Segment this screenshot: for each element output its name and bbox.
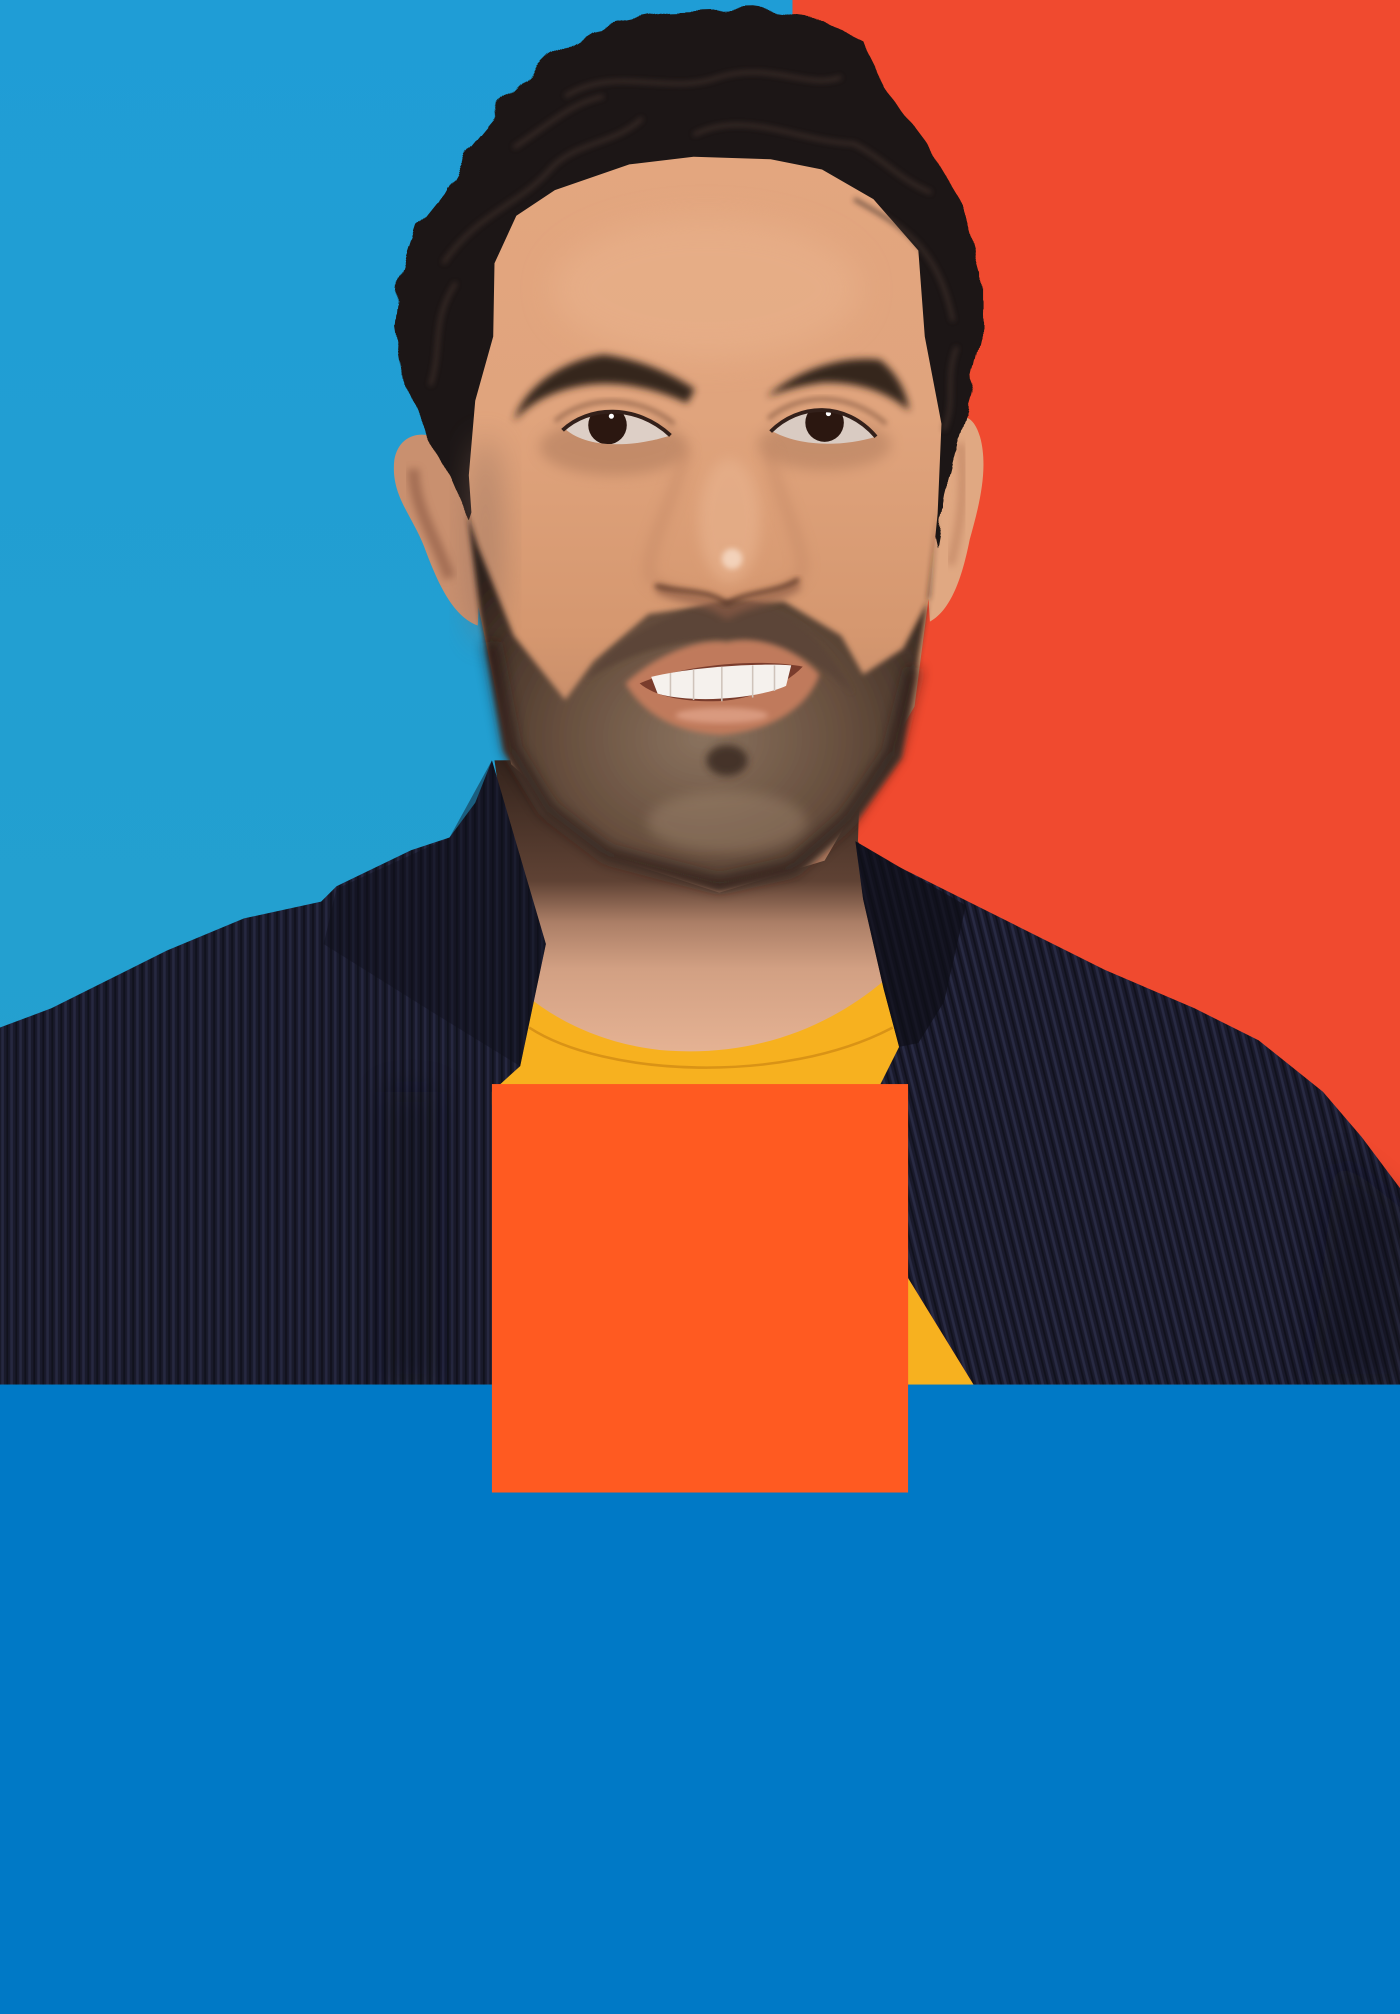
glint — [826, 411, 831, 416]
eyeball — [566, 414, 668, 444]
ear right — [925, 417, 983, 622]
lips — [626, 640, 819, 735]
mouth interior — [640, 663, 803, 701]
eye socket shadow — [539, 419, 688, 475]
eye left — [539, 398, 688, 475]
jaw dark edge — [491, 642, 914, 884]
t-shirt — [486, 976, 974, 1385]
upper lid — [563, 412, 670, 435]
ear right shape — [925, 417, 983, 622]
ear right inner — [950, 443, 963, 565]
jacket — [0, 760, 1400, 1385]
background: red right half — [792, 0, 1400, 1385]
lower lip highlight — [676, 708, 768, 723]
eye socket shadow — [758, 419, 891, 470]
soul patch — [706, 745, 748, 776]
shirt hem below square — [908, 1278, 974, 1385]
blue lower panel — [0, 1385, 1400, 2014]
tooth gaps — [670, 665, 774, 701]
eyelid fold — [555, 401, 674, 424]
ear left shape — [394, 435, 482, 626]
moustache — [586, 601, 853, 694]
left collar shadow — [324, 760, 546, 1066]
beard — [468, 507, 938, 891]
cheek left shading — [468, 437, 503, 642]
eyeball — [773, 412, 874, 444]
sclera — [566, 414, 668, 444]
ear left — [394, 435, 482, 626]
jacket right side — [855, 841, 1400, 1385]
teeth — [651, 665, 791, 699]
nose bridge highlight — [699, 459, 760, 582]
collar seam — [529, 1028, 893, 1068]
beard main — [468, 507, 938, 891]
iris — [588, 414, 627, 444]
orange square — [492, 1084, 908, 1493]
right fold shadow — [1310, 1156, 1400, 1385]
mouth — [626, 640, 819, 735]
nostril line — [655, 579, 799, 604]
jacket body — [0, 760, 546, 1385]
upper lid — [771, 410, 876, 437]
eyebrow right — [767, 359, 909, 411]
shirt upper — [486, 976, 912, 1105]
nose — [649, 450, 803, 614]
eye right — [758, 398, 891, 470]
eyebrow left — [514, 355, 695, 421]
nose side shadow — [649, 450, 803, 604]
neck — [494, 758, 886, 1051]
hair — [396, 10, 983, 546]
right collar shadow — [855, 841, 966, 1047]
eyelid fold — [768, 399, 886, 424]
background: blue left half — [0, 0, 792, 1385]
under-nose shadow — [658, 584, 799, 614]
face — [469, 157, 941, 893]
left fold shadow — [385, 1092, 437, 1385]
curl strokes — [443, 118, 642, 263]
nose tip glint — [722, 548, 742, 569]
poster illustration — [0, 0, 1400, 1493]
glint — [609, 414, 614, 419]
chin patch — [647, 791, 807, 853]
hair highlights — [430, 72, 957, 430]
ear left inner — [414, 469, 450, 578]
iris — [805, 412, 844, 442]
sclera — [773, 413, 874, 444]
forehead highlight — [552, 218, 861, 360]
